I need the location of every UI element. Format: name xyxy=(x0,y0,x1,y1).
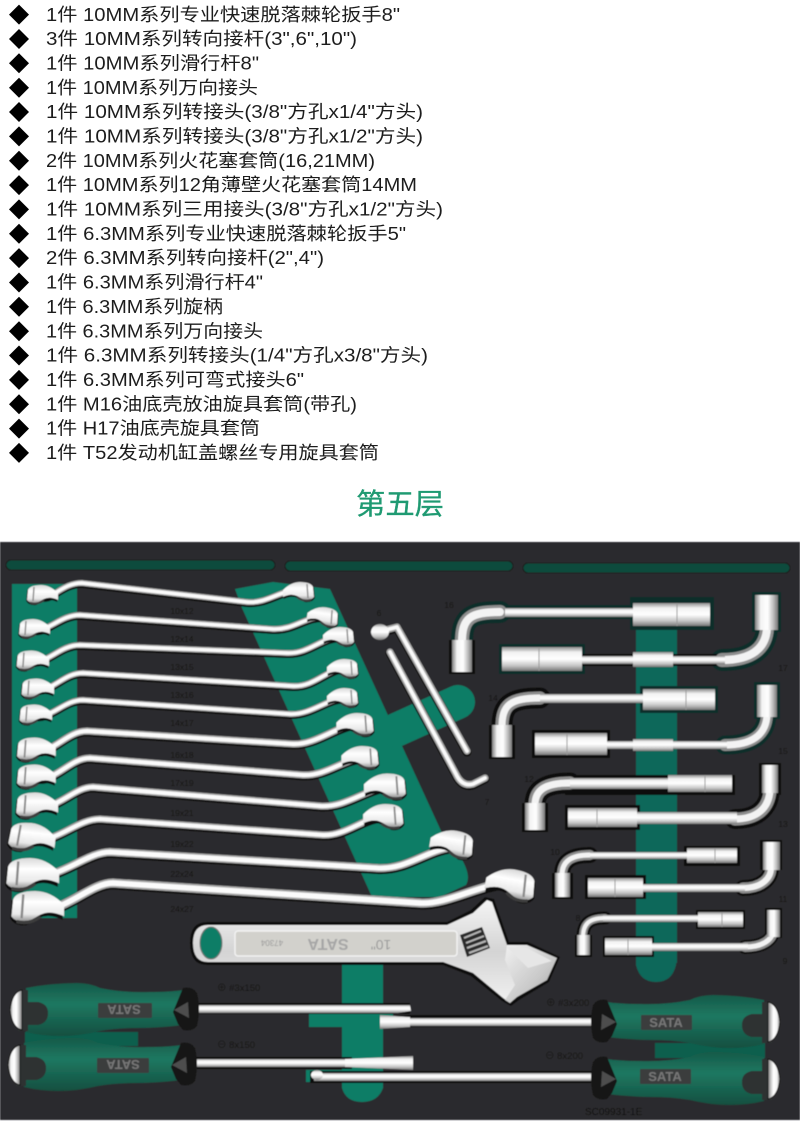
screwdriver bottom right: SATA xyxy=(648,1069,682,1084)
list row 11: 2件 6.3MM系列转向接杆(2",4") xyxy=(46,248,324,268)
parts list xyxy=(9,5,443,463)
wrench engraved panel: SATA xyxy=(307,935,349,952)
list row 8: 1件 10MM系列12角薄壁火花塞套筒14MM xyxy=(46,175,417,195)
hex key 6 xyxy=(371,624,467,752)
L wrench 15 xyxy=(532,682,780,758)
screwdriver top left xyxy=(10,983,411,1036)
list row 15: 1件 6.3MM系列转接头(1/4"方孔x3/8"方头) xyxy=(46,346,428,366)
wrench 12x14 xyxy=(18,605,340,639)
wrench size labels: 16x18 xyxy=(170,750,194,760)
wrench 17x19 xyxy=(16,746,380,790)
list row 12: 1件 6.3MM系列滑行杆4" xyxy=(46,272,263,292)
list row 18: 1件 H17油底壳旋具套筒 xyxy=(46,418,260,438)
L wrench 12 xyxy=(522,775,735,832)
L wrench 9 xyxy=(603,908,782,957)
list row 10: 1件 6.3MM系列专业快速脱落棘轮扳手5" xyxy=(46,224,406,244)
list row 4: 1件 10MM系列万向接头 xyxy=(46,78,258,98)
tray foam xyxy=(0,542,800,1120)
screwdriver bottom right xyxy=(310,1052,780,1105)
socket number labels: 7 xyxy=(485,797,490,807)
socket number labels: 17 xyxy=(778,663,788,673)
heading: layer five: 第五层 xyxy=(356,488,444,521)
wrench hanging hole xyxy=(200,927,222,959)
screwdriver size labels: ⊖ 8x150 xyxy=(217,1040,255,1051)
list row 16: 1件 6.3MM系列可弯式接头6" xyxy=(46,370,304,390)
wrench 24x27 xyxy=(10,865,539,925)
screwdriver size labels xyxy=(217,983,589,1062)
wrench engraved panel: 10" xyxy=(371,937,391,953)
wrench size labels: 12x14 xyxy=(170,634,194,644)
L wrench 17 xyxy=(499,592,781,674)
socket number labels xyxy=(377,600,788,966)
list row 1: 1件 10MM系列专业快速脱落棘轮扳手8" xyxy=(46,5,400,25)
wrench size labels: 22x24 xyxy=(170,869,194,879)
wrench handle and fixed jaw xyxy=(193,900,528,1003)
wrench size labels: 17x19 xyxy=(170,778,194,788)
socket number labels: 11 xyxy=(779,894,788,904)
L-shaped hex keys xyxy=(371,624,485,786)
green foam cutouts xyxy=(12,582,765,1102)
wrench engraved panel xyxy=(235,931,457,956)
wrench 19x21 xyxy=(15,774,407,820)
socket number labels: 9 xyxy=(783,956,788,966)
screwdriver size labels: ⊖ 8x200 xyxy=(545,1051,583,1062)
screwdriver top right: SATA xyxy=(649,1015,683,1030)
wrench 22x24 xyxy=(5,827,477,892)
screwdriver bottom left: SATA xyxy=(106,1057,140,1072)
wrench worm gear xyxy=(460,927,490,957)
screwdriver top left: SATA xyxy=(107,1002,141,1017)
wrench size labels: 19x21 xyxy=(170,808,194,818)
L wrench 11 xyxy=(585,840,782,899)
L wrench 8 xyxy=(575,910,745,957)
wrench 13x15 xyxy=(16,627,355,672)
list row 7: 2件 10MM系列火花塞套筒(16,21MM) xyxy=(46,151,375,171)
list row 9: 1件 10MM系列三用接头(3/8"方孔x1/2"方头) xyxy=(46,200,443,220)
L socket wrenches xyxy=(449,592,782,957)
list row 13: 1件 6.3MM系列旋柄 xyxy=(46,297,223,317)
wrench size labels: 13x16 xyxy=(170,690,194,700)
list row 17: 1件 M16油底壳放油旋具套筒(带孔) xyxy=(46,394,357,414)
socket number labels: 13 xyxy=(778,819,788,829)
socket number labels: 15 xyxy=(778,746,788,756)
socket number labels: 12 xyxy=(524,774,534,784)
wrench size labels: 13x15 xyxy=(170,662,194,672)
wrench size labels: 24x27 xyxy=(170,904,194,914)
wrench size labels xyxy=(170,606,194,914)
socket number labels: 8 xyxy=(576,913,581,923)
panel: tool tray xyxy=(0,542,800,1120)
wrench 19x22 xyxy=(6,804,404,856)
wrench size labels: 10x12 xyxy=(170,606,194,616)
wrench size labels: 19x22 xyxy=(170,839,194,849)
screwdriver bottom left xyxy=(8,1038,413,1091)
screwdrivers xyxy=(8,983,780,1105)
wrench size labels: 14x17 xyxy=(170,718,194,728)
socket number labels: 14 xyxy=(488,693,498,703)
screwdriver top right xyxy=(380,995,780,1048)
wrench 13x16 xyxy=(21,659,359,700)
L wrench 13 xyxy=(565,763,781,830)
L wrench 10 xyxy=(552,846,740,899)
socket number labels: 6 xyxy=(377,608,382,618)
list row 14: 1件 6.3MM系列万向接头 xyxy=(46,322,263,342)
wrench shadow xyxy=(190,897,560,1006)
wrench engraved panel: 47304 xyxy=(260,938,283,947)
screwdriver size labels: ⊕ #3x200 xyxy=(546,998,589,1009)
list row 3: 1件 10MM系列滑行杆8" xyxy=(46,54,259,74)
socket number labels: 10 xyxy=(550,847,560,857)
list row 19: 1件 T52发动机缸盖螺丝专用旋具套筒 xyxy=(46,442,379,463)
socket number labels: 16 xyxy=(444,600,454,610)
wrench 10x12 xyxy=(26,582,315,605)
L wrench 16 xyxy=(449,597,714,674)
top slots xyxy=(6,560,790,573)
wrench moving jaw xyxy=(505,945,557,1003)
L wrench 14 xyxy=(489,686,718,759)
list row 5: 1件 10MM系列转接头(3/8"方孔x1/4"方头) xyxy=(46,102,423,122)
screwdriver size labels: ⊕ #3x150 xyxy=(217,983,260,994)
model number: SC09931-1E xyxy=(585,1107,643,1118)
wrench 16x18 xyxy=(16,713,375,763)
list row 2: 3件 10MM系列转向接杆(3",6",10") xyxy=(46,29,357,49)
hex key 7 xyxy=(390,652,485,786)
list row 6: 1件 10MM系列转接头(3/8"方孔x1/2"方头) xyxy=(46,126,423,146)
double ring wrenches xyxy=(5,582,539,925)
adjustable wrench xyxy=(190,897,560,1006)
wrench mouth facets xyxy=(507,947,552,968)
wrench 14x17 xyxy=(19,688,359,726)
